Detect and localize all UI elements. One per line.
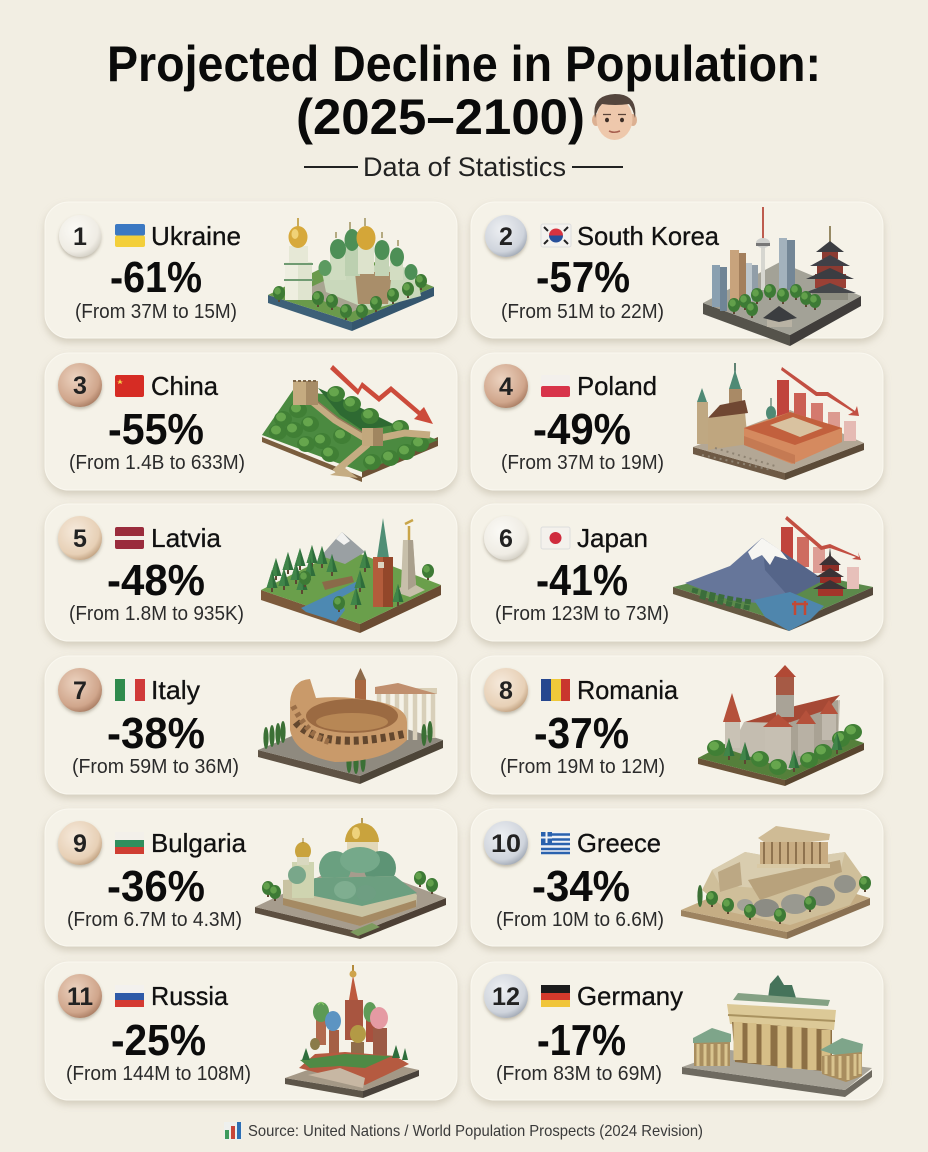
country name: Poland	[577, 371, 657, 401]
icon: man emoji	[592, 94, 637, 140]
panel: South Korea	[471, 202, 883, 346]
subtitle: Data of Statistics	[363, 152, 566, 182]
badge: rank 9: 9	[73, 830, 87, 858]
panel: Greece	[471, 809, 883, 946]
panel: Poland	[471, 353, 883, 490]
decline percent: -17%	[537, 1016, 626, 1065]
population range: (From 123M to 73M)	[495, 603, 669, 625]
flag: Romania	[541, 679, 570, 701]
badge: rank 9	[58, 821, 102, 865]
country name: Romania	[577, 675, 679, 705]
badge: rank 6: 6	[499, 525, 513, 553]
flag: Poland	[541, 375, 570, 397]
population range: (From 51M to 22M)	[501, 301, 664, 323]
badge: rank 8: 8	[499, 677, 513, 705]
illustration: Riga forest, river and monument	[261, 518, 441, 633]
badge: rank 7	[58, 668, 102, 712]
decline percent: -36%	[107, 862, 205, 911]
population range: (From 19M to 12M)	[500, 756, 665, 778]
decline percent: -57%	[536, 253, 630, 302]
panel: Latvia	[45, 504, 457, 641]
badge: rank 11	[58, 974, 102, 1018]
country name: South Korea	[577, 221, 720, 251]
icon: bar chart	[224, 1122, 242, 1140]
panel: China	[45, 353, 457, 490]
decline percent: -61%	[110, 253, 202, 302]
flag: Russia	[115, 985, 144, 1007]
panel: Russia	[45, 962, 457, 1100]
illustration: Acropolis and Parthenon	[681, 826, 871, 939]
panel: Japan	[471, 504, 883, 641]
badge: rank 10	[484, 821, 528, 865]
illustration: Warsaw old town with decline bars	[693, 363, 864, 480]
decline percent: -25%	[111, 1016, 206, 1065]
flag: Greece	[541, 832, 570, 854]
flag: Latvia	[115, 527, 144, 549]
badge: rank 1: 1	[73, 223, 87, 251]
badge: rank 10: 10	[491, 830, 521, 858]
badge: rank 12: 12	[492, 983, 520, 1011]
population range: (From 37M to 15M)	[75, 301, 237, 323]
illustration: Seoul skyline and pagoda	[703, 207, 861, 346]
illustration: Bran castle	[698, 665, 864, 786]
population range: (From 144M to 108M)	[66, 1063, 251, 1085]
panel: Germany	[471, 962, 883, 1100]
panel: Ukraine	[45, 202, 457, 338]
illustration: Alexander Nevsky cathedral	[255, 818, 446, 939]
population range: (From 59M to 36M)	[72, 756, 239, 778]
population range: (From 1.8M to 935K)	[69, 603, 244, 625]
flag: Bulgaria	[115, 832, 144, 854]
flag: China	[115, 375, 144, 397]
country name: Russia	[151, 981, 229, 1011]
population range: (From 6.7M to 4.3M)	[67, 909, 242, 931]
population range: (From 37M to 19M)	[501, 452, 664, 474]
flag: Italy	[115, 679, 145, 701]
badge: rank 2	[485, 215, 527, 257]
badge: rank 8	[484, 668, 528, 712]
decline percent: -41%	[536, 556, 628, 605]
illustration: Brandenburg Gate	[682, 975, 872, 1097]
decline percent: -48%	[107, 556, 205, 605]
source line: Source: United Nations / World Population Prospects (2024 Revision)	[248, 1123, 703, 1140]
panel: Romania	[471, 656, 883, 794]
badge: rank 5: 5	[73, 525, 87, 553]
population range: (From 1.4B to 633M)	[69, 452, 245, 474]
flag: Ukraine	[115, 224, 145, 247]
country name: Japan	[577, 523, 648, 553]
country name: Latvia	[151, 523, 222, 553]
badge: rank 4	[484, 364, 528, 408]
title: Projected Decline in Population:	[107, 36, 821, 92]
decline percent: -37%	[534, 709, 629, 758]
badge: rank 12	[484, 974, 528, 1018]
country name: Germany	[577, 981, 683, 1011]
badge: rank 3: 3	[73, 372, 87, 400]
decline percent: -49%	[533, 405, 631, 454]
badge: rank 7: 7	[73, 677, 87, 705]
country name: Bulgaria	[151, 828, 247, 858]
country name: Ukraine	[151, 221, 241, 251]
country name: Greece	[577, 828, 661, 858]
flag: South Korea	[541, 224, 571, 247]
illustration: Colosseum	[258, 668, 443, 784]
country name: China	[151, 371, 219, 401]
illustration: Saint Sophia cathedral	[268, 218, 434, 331]
badge: rank 5	[58, 516, 102, 560]
decline percent: -55%	[108, 405, 204, 454]
title	[107, 36, 821, 145]
title: (2025–2100)	[296, 89, 585, 145]
badge: rank 6	[484, 516, 528, 560]
badge: rank 2: 2	[499, 223, 513, 251]
illustration: Mount Fuji with decline bars	[673, 516, 873, 631]
decline percent: -34%	[532, 862, 630, 911]
decline percent: -38%	[107, 709, 205, 758]
illustration: Saint Basil's cathedral	[285, 965, 419, 1098]
panel: Italy	[45, 656, 457, 794]
flag: Germany	[541, 985, 570, 1007]
badge: rank 1	[59, 215, 101, 257]
population range: (From 10M to 6.6M)	[496, 909, 664, 931]
badge: rank 11: 11	[67, 983, 93, 1011]
population range: (From 83M to 69M)	[496, 1063, 662, 1085]
panel: Bulgaria	[45, 809, 457, 946]
country name: Italy	[151, 675, 200, 705]
badge: rank 3	[58, 363, 102, 407]
illustration: Great Wall with decline arrow	[262, 365, 438, 482]
flag: Japan	[541, 527, 570, 549]
badge: rank 4: 4	[499, 373, 513, 401]
